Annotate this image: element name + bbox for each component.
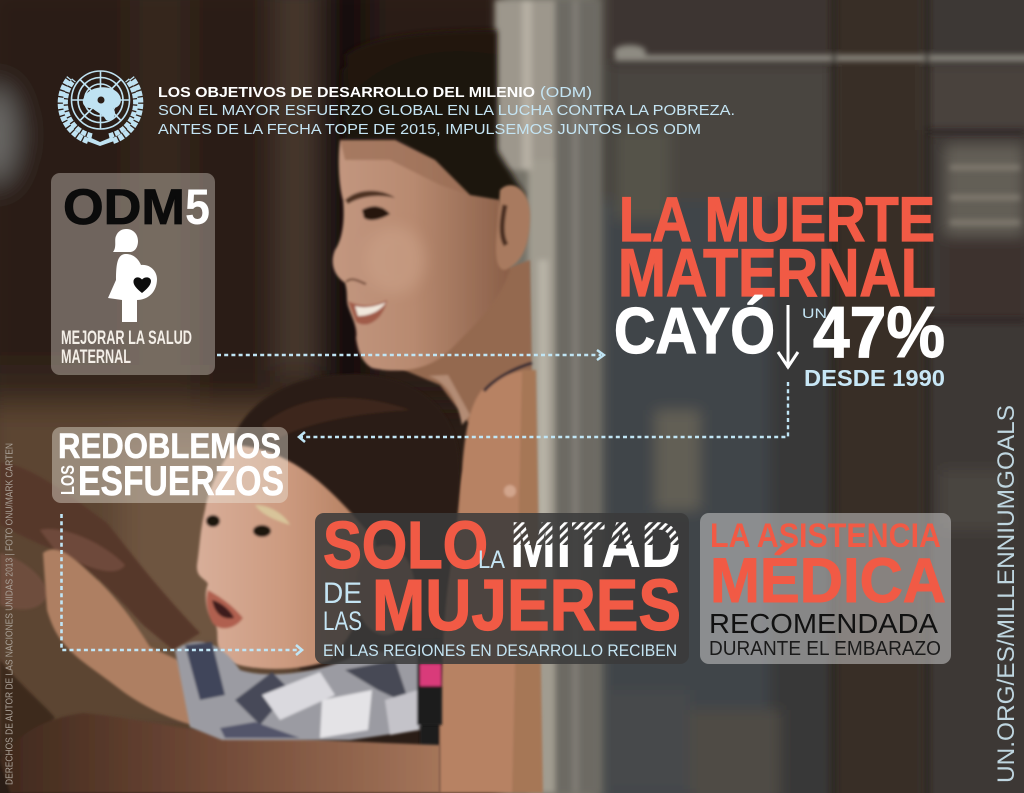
panel: recommended medical care: MÉDICA [710, 546, 946, 616]
headline: maternal death fell 47%: 47% [813, 293, 945, 373]
mother ear [496, 185, 530, 270]
goal label [61, 328, 192, 368]
door post [495, 0, 600, 793]
panel: only half of women: EN LAS REGIONES EN DESARROLLO RECIBEN [323, 641, 677, 660]
header text: (ODM) [540, 85, 592, 101]
header text: LOS OBJETIVOS DE DESARROLLO DEL MILENIO [158, 85, 535, 101]
header text: SON EL MAYOR ESFUERZO GLOBAL EN LA LUCHA CONTRA LA POBREZA. [158, 103, 735, 119]
headline: maternal death fell 47%: UN [802, 305, 827, 321]
half-filled word: mitad: MITAD [510, 508, 681, 581]
mother neck and body [380, 260, 543, 793]
panel: recommended medical care: DURANTE EL EMBARAZO [709, 638, 941, 660]
panel: only half of women [315, 508, 689, 664]
panel: recommended medical care: LA ASISTENCIA [710, 517, 941, 555]
child camouflage shirt [175, 640, 442, 740]
panel: redoblemos los esfuerzos [52, 427, 288, 504]
headline: maternal death fell 47%: DESDE 1990 [804, 365, 945, 391]
goal label: MATERNAL [61, 347, 131, 368]
panel: recommended medical care [700, 513, 951, 664]
panel: only half of women: DE [323, 577, 362, 610]
left wall background [0, 0, 540, 745]
headline: maternal death fell 47% [614, 185, 945, 391]
photo credit vertical: DERECHOS DE AUTOR DE LAS NACIONES UNIDAS 2013 | FOTO ONU/MARK CARTEN [4, 443, 16, 785]
panel: only half of women: MUJERES [372, 566, 681, 646]
website url vertical: UN.ORG/ES/MILLENNIUMGOALS [993, 405, 1020, 783]
header text: ANTES DE LA FECHA TOPE DE 2015, IMPULSEMOS JUNTOS LOS ODM [158, 122, 701, 138]
icon: down arrow [778, 305, 798, 368]
panel: only half of women: SOLO [323, 508, 488, 583]
child face [197, 445, 415, 669]
goal label: MEJORAR LA SALUD [61, 328, 192, 349]
child hair [232, 374, 460, 670]
header text [158, 85, 735, 138]
icon: UN emblem [61, 71, 140, 146]
headline: maternal death fell 47%: CAYÓ [614, 294, 775, 367]
icon: pregnant woman with heart [108, 229, 157, 322]
panel: ODM5 goal badge [51, 173, 215, 375]
panel: only half of women: LAS [323, 606, 362, 636]
adult hands and arms [0, 462, 440, 793]
heading: ODM5: ODM [63, 179, 185, 235]
pole and wood lines [614, 0, 1024, 793]
panel: only half of women: LA [478, 546, 505, 574]
mother hair [342, 30, 525, 230]
mother face [333, 140, 510, 371]
heading: ODM5: 5 [185, 179, 210, 235]
panel: redoblemos los esfuerzos: ESFUERZOS [78, 457, 284, 504]
right wooden wall [500, 0, 1024, 793]
header block [61, 71, 735, 146]
arrow: dotted line from redoblemos to solo la mitad [62, 514, 302, 655]
child arm [43, 549, 200, 727]
headline: maternal death fell 47%: MATERNAL [618, 235, 936, 311]
arrow: dotted line from goal badge to headline [217, 350, 604, 360]
headline: maternal death fell 47%: LA MUERTE [619, 185, 935, 255]
panel: recommended medical care: RECOMENDADA [709, 608, 938, 639]
panel: redoblemos los esfuerzos: REDOBLEMOS [58, 427, 281, 466]
panel: redoblemos los esfuerzos: LOS [58, 465, 78, 495]
arrow: dotted line from headline to redoblemos [299, 382, 788, 442]
